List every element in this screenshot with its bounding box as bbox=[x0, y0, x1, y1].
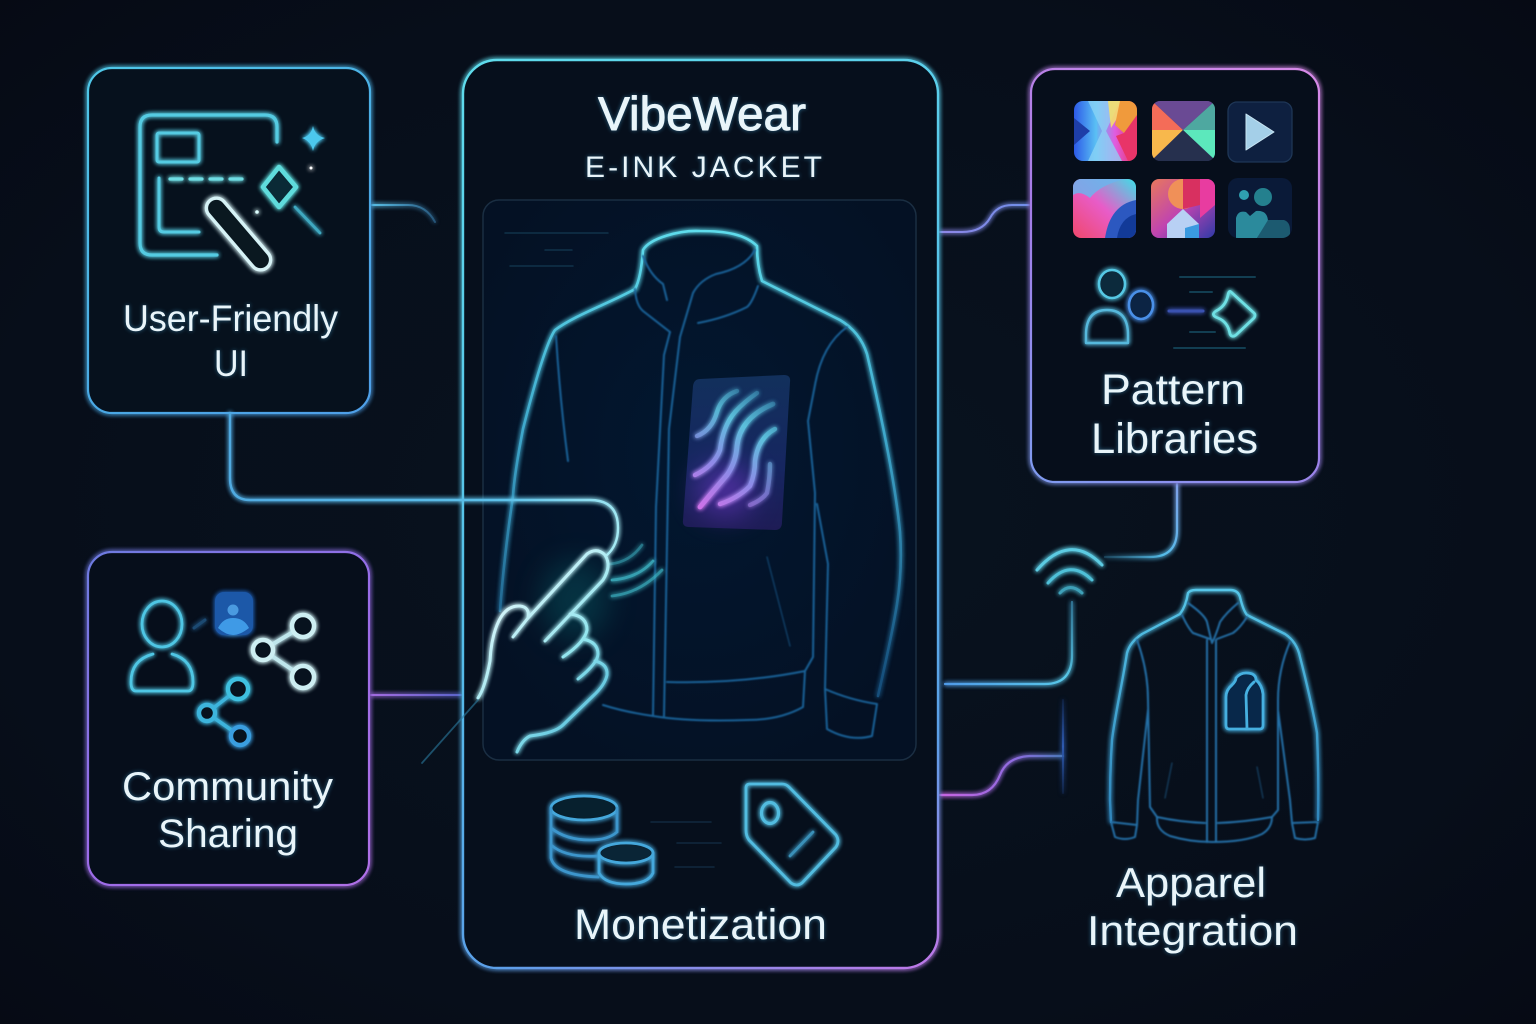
connector: UI box to jacket panel bbox=[370, 205, 435, 222]
illustration: jacket outline bbox=[500, 231, 901, 738]
icon: coin stack bbox=[551, 796, 653, 884]
heading: Community Sharing bbox=[122, 765, 333, 856]
panel: Community Sharing bbox=[88, 552, 369, 885]
heading: User-Friendly UI: User-Friendly bbox=[123, 298, 338, 339]
heading: User-Friendly UI: UI bbox=[214, 343, 248, 384]
connector: pattern libraries down to wireless bbox=[1105, 483, 1177, 557]
icon: people and sharing bbox=[131, 592, 314, 745]
decorative scan lines bbox=[505, 233, 608, 266]
heading: Monetization: Monetization bbox=[574, 901, 827, 949]
pattern tile 2 bbox=[1152, 101, 1215, 161]
heading: Community Sharing: Sharing bbox=[158, 812, 298, 856]
heading: User-Friendly UI bbox=[123, 298, 338, 384]
panel: Pattern Libraries bbox=[1031, 69, 1319, 482]
pattern tile 6 bbox=[1228, 178, 1292, 238]
pattern tile 4 bbox=[1073, 179, 1136, 238]
connector: community sharing to main panel bbox=[370, 694, 462, 696]
illustration: apparel integration jacket bbox=[1110, 590, 1318, 842]
decorative lines bbox=[1174, 277, 1255, 348]
icon: wireless signal bbox=[1037, 550, 1102, 593]
title: VibeWear: VibeWear bbox=[598, 87, 806, 140]
heading: Community Sharing: Community bbox=[122, 765, 333, 809]
pattern tile 5 bbox=[1151, 179, 1215, 238]
connector: pattern libraries to main panel bbox=[940, 205, 1031, 232]
connector: main panel to wireless signal bbox=[945, 602, 1072, 684]
heading: Apparel Integration bbox=[1087, 859, 1298, 954]
illustration: pointing hand bbox=[230, 413, 662, 763]
icon: price tag bbox=[746, 784, 838, 885]
pattern tile 1 bbox=[1074, 101, 1137, 161]
panel: main VibeWear jacket bbox=[230, 60, 938, 968]
heading: Pattern Libraries bbox=[1091, 366, 1258, 463]
icon: users to pattern bbox=[1086, 270, 1255, 343]
subtitle: E-Ink Jacket: E-INK JACKET bbox=[585, 151, 822, 184]
heading: Pattern Libraries: Libraries bbox=[1091, 415, 1258, 463]
pattern tile 3: play bbox=[1228, 102, 1292, 162]
heading: Pattern Libraries: Pattern bbox=[1101, 366, 1245, 414]
e-ink display patch bbox=[683, 375, 790, 530]
heading: Apparel Integration: Apparel bbox=[1116, 859, 1266, 906]
wave pattern bbox=[695, 391, 775, 507]
connector: main panel to apparel integration bbox=[940, 700, 1063, 795]
icon: interface with magic wand bbox=[140, 115, 325, 274]
icon: pocket pouch bbox=[1226, 673, 1263, 729]
heading: Apparel Integration: Integration bbox=[1087, 907, 1298, 954]
decorative dashes bbox=[651, 822, 721, 867]
panel: jacket display frame bbox=[483, 200, 916, 760]
panel: User-Friendly UI bbox=[88, 68, 370, 413]
